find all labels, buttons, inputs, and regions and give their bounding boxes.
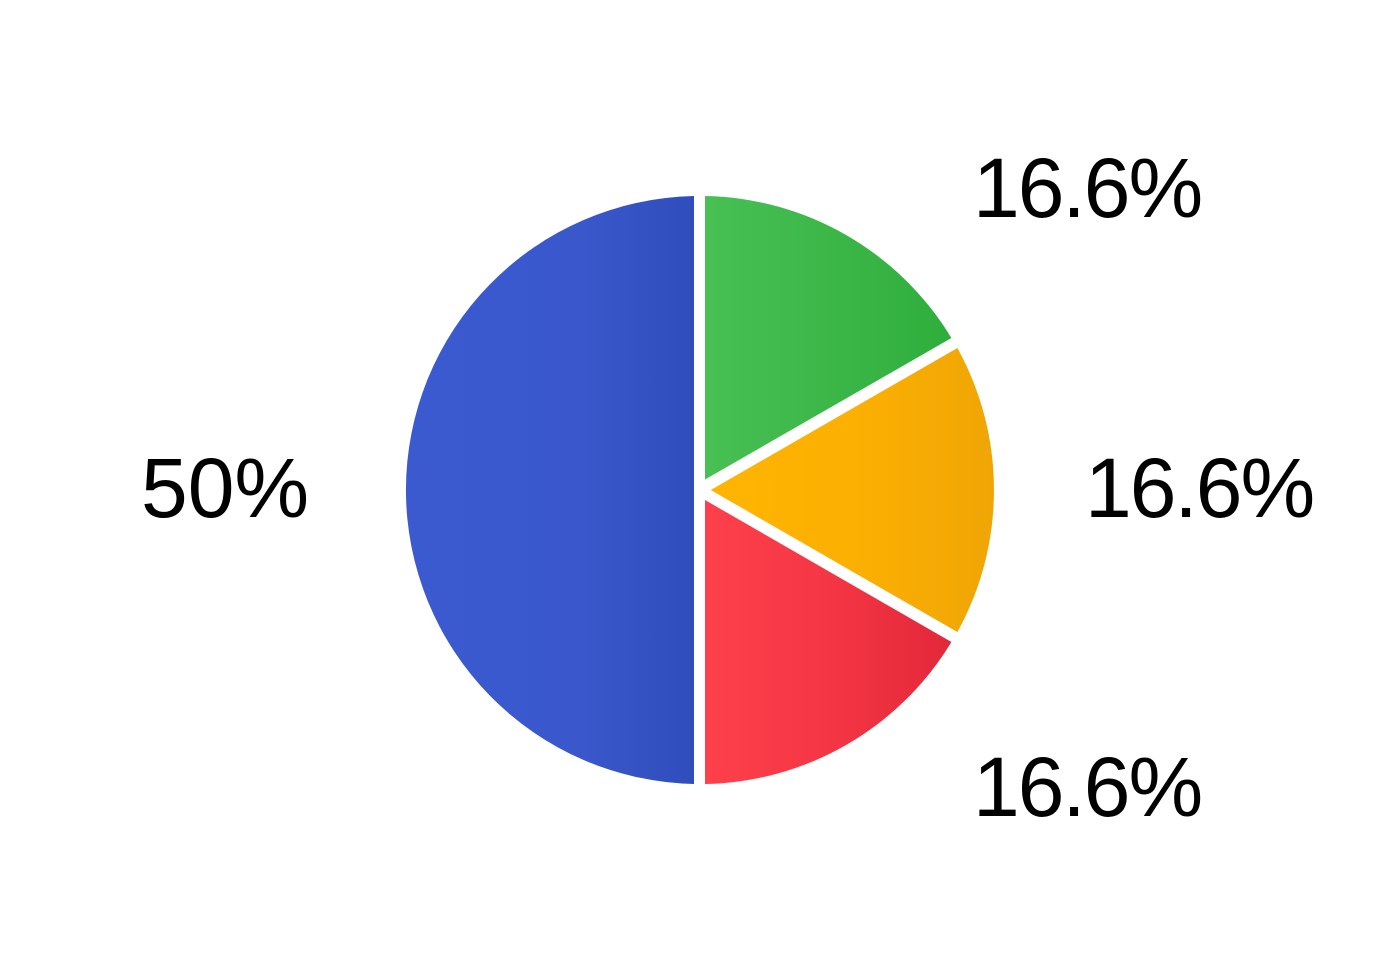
slice: blue 50%: [406, 196, 694, 784]
slice: green 16.6%: [705, 196, 951, 480]
label: bottom 16.6%: 16.6%: [973, 740, 1201, 834]
slice: yellow 16.6%: [711, 348, 994, 632]
label: top 16.6%: 16.6%: [973, 141, 1201, 235]
slice: red 16.6%: [705, 500, 951, 784]
label: middle 16.6%: 16.6%: [1085, 441, 1313, 535]
label: 50%: 50%: [141, 441, 309, 535]
